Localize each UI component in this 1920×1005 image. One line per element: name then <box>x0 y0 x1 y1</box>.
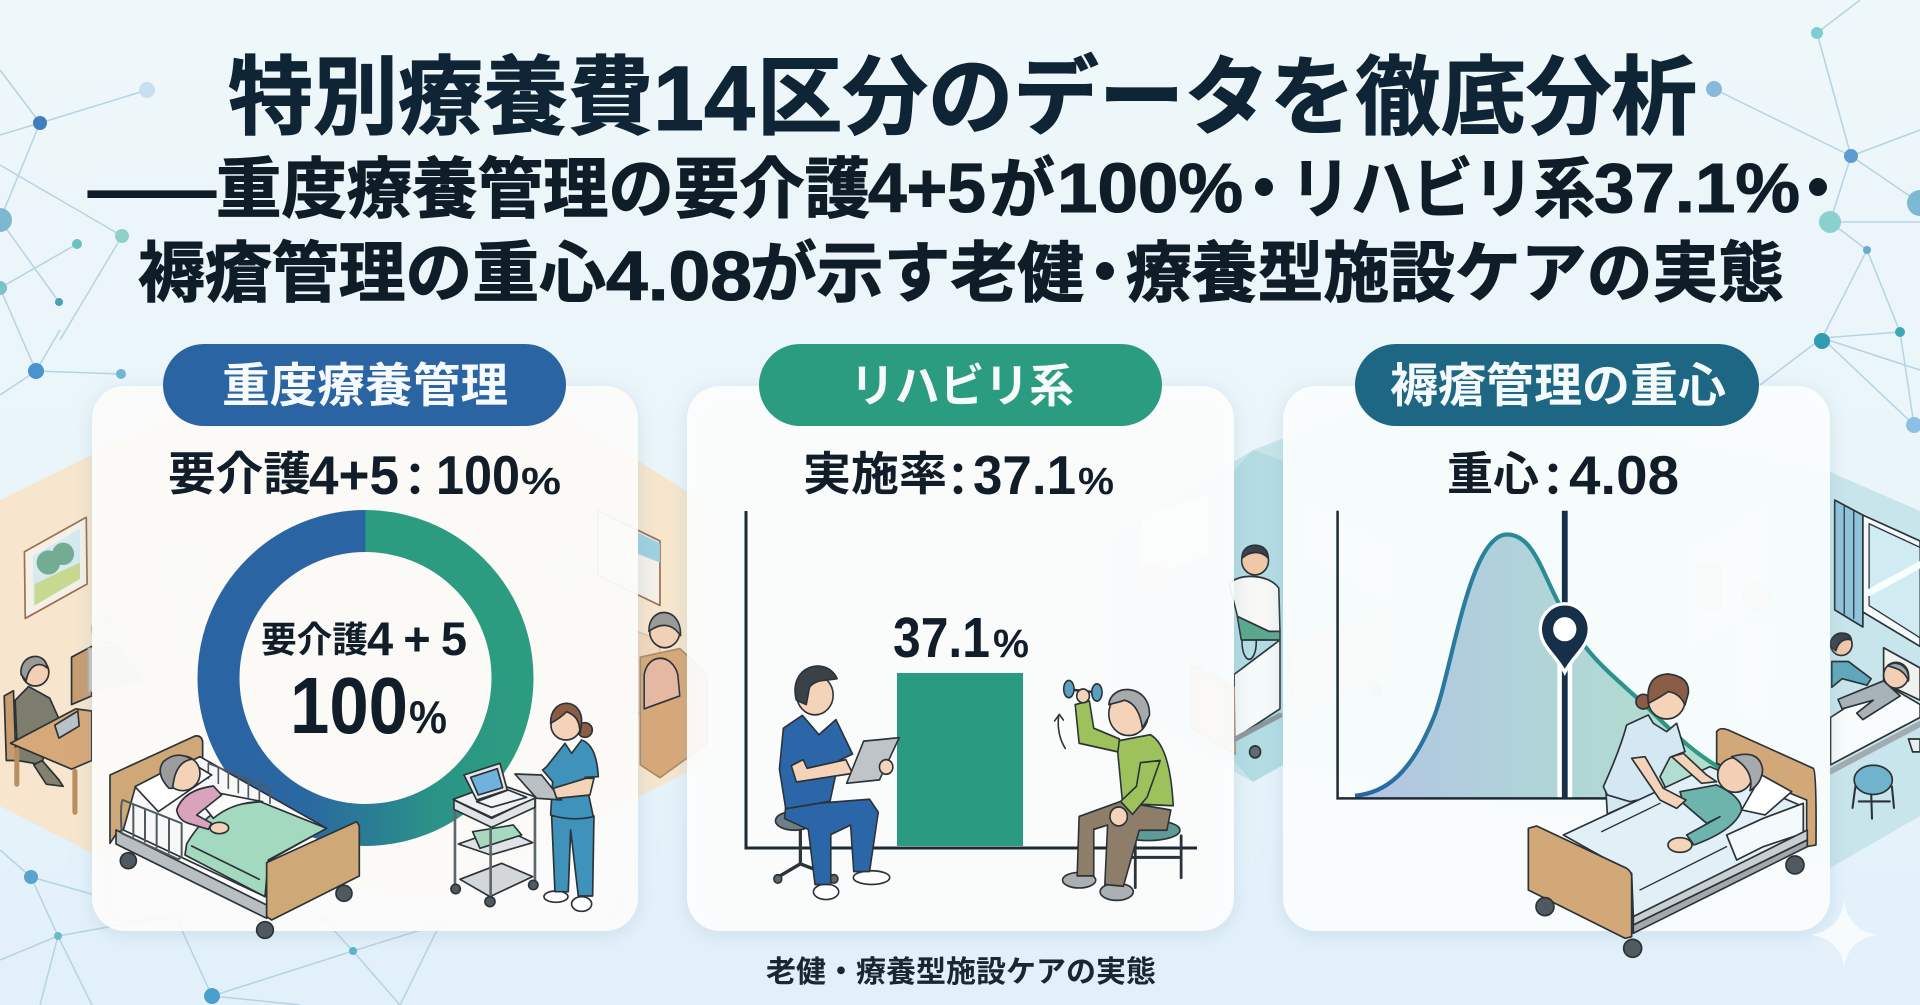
curtain <box>1835 500 1863 627</box>
mattress <box>123 757 327 897</box>
stat line <box>803 444 1114 506</box>
stat line: % <box>1078 461 1114 503</box>
head <box>1109 692 1148 736</box>
trousers <box>1077 801 1171 886</box>
forearm <box>553 778 594 798</box>
bar <box>897 673 1023 846</box>
illustration: nurse and cart <box>451 703 598 911</box>
frame <box>116 830 267 918</box>
painting <box>24 517 87 618</box>
sparkle mark <box>1811 900 1877 967</box>
tablet <box>847 738 899 783</box>
arm <box>791 760 853 782</box>
network pattern left <box>0 70 447 1005</box>
curve <box>1355 534 1722 796</box>
distribution chart <box>1338 511 1726 798</box>
illustration: nurse and patient in bed <box>1528 674 1816 957</box>
head <box>165 756 200 791</box>
laptop screen <box>464 763 507 800</box>
near rail <box>121 800 182 859</box>
towels <box>473 825 522 848</box>
window <box>1863 515 1920 646</box>
panel card <box>687 386 1234 931</box>
centroid pin <box>1540 604 1589 672</box>
lounge figures and furniture <box>4 511 660 812</box>
stat line: 実施率 <box>803 448 947 500</box>
centroid line <box>1558 511 1572 798</box>
title line 2: 100% <box>1057 149 1243 227</box>
illustration: senior lifting dumbbell <box>1055 680 1181 900</box>
bar chart <box>746 511 1197 848</box>
headboard <box>1717 729 1816 847</box>
stat line: % <box>521 461 561 503</box>
wheels <box>1536 898 1554 916</box>
heading pill: リハビリ系 <box>850 360 1074 412</box>
clipboard <box>515 774 562 800</box>
isometric room: left lounge <box>0 386 710 900</box>
stat line: 37.1 <box>973 444 1076 506</box>
room floor and wall <box>1107 386 1920 868</box>
panel: 重度療養管理 <box>92 344 638 938</box>
shoes <box>813 884 839 900</box>
pillow <box>1742 775 1792 815</box>
arrow <box>1055 714 1065 748</box>
donut value: % <box>409 691 447 743</box>
room floor and wall <box>0 386 710 900</box>
title line 1: 区分のデータを徹底分析 <box>757 50 1697 146</box>
heading pill: 褥瘡管理の重心 <box>1390 359 1726 412</box>
title line 3: ・ <box>1072 236 1138 310</box>
patient head <box>1718 758 1752 792</box>
title line 2: リハビリ系 <box>1290 152 1595 226</box>
top <box>543 740 598 819</box>
shoes <box>544 891 568 902</box>
bun <box>1636 694 1651 709</box>
ghost bed <box>1287 614 1388 717</box>
title line 2: 重度療養管理の要介護 <box>216 152 870 226</box>
illustration: therapist with tablet <box>774 666 899 900</box>
blanket <box>185 802 327 897</box>
stat line: ： <box>1530 454 1576 506</box>
painting right <box>598 511 660 606</box>
stool <box>1110 836 1181 887</box>
elder with laptop <box>15 686 63 765</box>
hand <box>879 760 893 774</box>
stat line: 重心 <box>1447 448 1539 500</box>
stat line: 要介護 <box>168 448 311 500</box>
sheet fold <box>200 793 263 818</box>
panel: 褥瘡管理の重心 <box>1283 344 1830 957</box>
pillow <box>135 760 212 812</box>
footboard <box>1528 826 1632 938</box>
title line 2: ・ <box>1231 152 1297 226</box>
panel card <box>1283 386 1830 931</box>
sweater <box>177 786 222 829</box>
footer caption: 老健・療養型施設ケアの実態 <box>766 956 1156 989</box>
bed <box>1234 640 1280 739</box>
title line 2 <box>88 149 1851 227</box>
title line 3: 療養型施設ケアの実態 <box>1126 236 1784 310</box>
stool <box>779 829 834 877</box>
isometric room: right ward <box>1107 386 1920 868</box>
head <box>551 710 581 740</box>
stat line <box>168 444 561 506</box>
donut chart <box>218 531 512 825</box>
panel: リハビリ系 <box>687 344 1234 931</box>
chairs <box>72 646 92 705</box>
sheet lines <box>1602 803 1737 890</box>
title line 1: 14 <box>653 48 755 150</box>
elderly woman on sofa <box>640 612 707 778</box>
laptop base <box>477 790 527 807</box>
stat line: ： <box>935 454 981 506</box>
donut label: 4+5 <box>367 612 467 665</box>
nurse skirt <box>1606 792 1635 814</box>
panel card <box>92 386 638 931</box>
stat line: 100 <box>436 444 520 506</box>
hand <box>210 822 229 834</box>
shirt <box>779 715 853 809</box>
donut label <box>261 612 467 665</box>
sweater <box>1117 735 1173 806</box>
stool <box>1853 786 1894 819</box>
nurse arms <box>1632 757 1686 808</box>
donut label: 要介護 <box>261 619 368 660</box>
headboard <box>110 736 203 843</box>
patient <box>1884 662 1908 688</box>
title line 3 <box>138 236 1784 315</box>
trousers <box>552 816 594 896</box>
wheelchair person <box>1229 576 1280 631</box>
heading pill <box>759 344 1162 426</box>
title line 3: 4.08 <box>606 237 752 315</box>
title line 2: 4+5 <box>868 149 986 227</box>
bun <box>578 723 592 737</box>
donut value: 100 <box>290 661 408 750</box>
patient arm <box>1680 785 1742 845</box>
title line 3: 褥瘡管理の重心 <box>138 236 606 310</box>
title line 3: が示す老健 <box>750 236 1084 310</box>
heading pill: 重度療養管理 <box>222 359 508 412</box>
cart drawer <box>454 797 535 827</box>
trousers <box>785 799 878 884</box>
nurse uniform <box>1603 715 1685 802</box>
title line 2: 37.1% <box>1594 149 1800 227</box>
ghost lamp and figures <box>162 541 206 584</box>
mattress <box>1563 767 1803 917</box>
head <box>797 675 833 715</box>
wheels <box>120 853 136 869</box>
ghost calendar and chart <box>1302 500 1349 580</box>
illustration: patient in bed <box>110 736 359 938</box>
patient bed <box>1831 683 1920 765</box>
stat line: ： <box>392 454 438 506</box>
title line 1 <box>228 48 1697 150</box>
shoes <box>1063 872 1096 888</box>
stat line <box>1447 444 1679 506</box>
axes <box>1338 511 1726 798</box>
centroid line halo <box>1547 657 1583 797</box>
title line 2: が <box>989 152 1055 226</box>
bar value: % <box>993 622 1029 666</box>
network pattern right <box>1706 0 1920 433</box>
table <box>11 709 92 769</box>
far rail <box>208 763 270 803</box>
cart legs <box>455 800 535 902</box>
title line 1: 特別療養費 <box>228 50 653 146</box>
ghost board and nurse <box>1687 504 1770 651</box>
stat line: 4+5 <box>309 444 399 506</box>
stat line: 4.08 <box>1569 444 1679 506</box>
heading pill <box>1355 344 1759 426</box>
title line 2: —— <box>88 152 216 226</box>
title <box>88 48 1851 315</box>
caregiver <box>1831 633 1852 655</box>
area under curve <box>1355 534 1722 797</box>
dumbbell <box>1069 689 1097 692</box>
bar value: 37.1 <box>893 606 990 670</box>
cart shelves <box>458 828 533 855</box>
title line 2: ・ <box>1785 152 1851 226</box>
cart top <box>453 783 537 817</box>
laptop <box>55 711 79 738</box>
nurse head <box>1648 682 1685 719</box>
ward ghost details and figures <box>1136 494 1280 758</box>
frame <box>1633 830 1807 925</box>
heading pill <box>163 344 566 426</box>
footboard <box>267 822 359 920</box>
